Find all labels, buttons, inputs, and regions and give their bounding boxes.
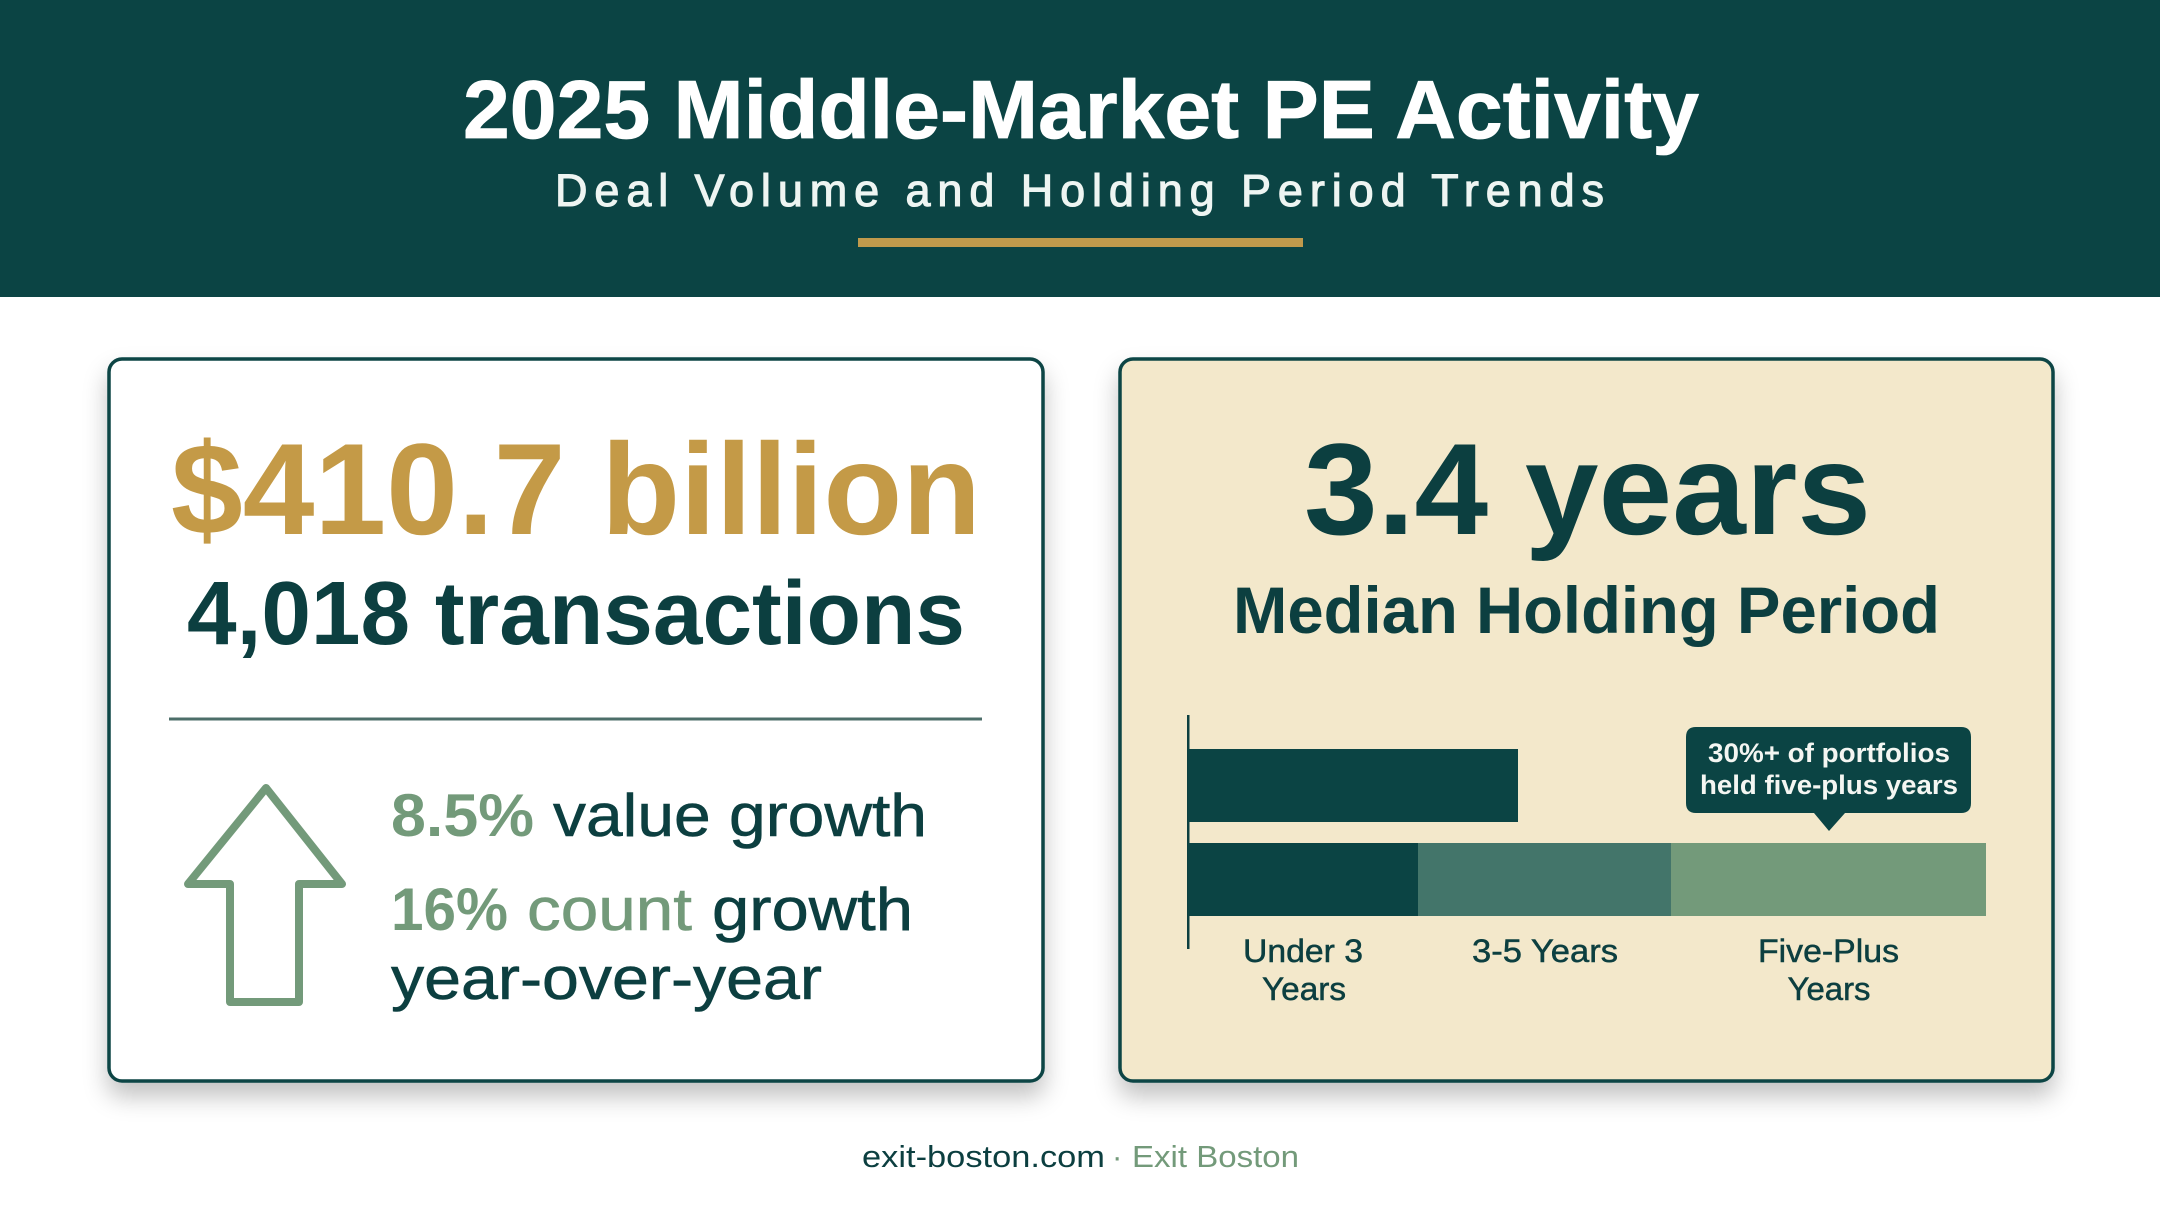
footer: exit-boston.com bbox=[862, 1139, 1105, 1174]
count label: count bbox=[527, 876, 692, 943]
callout: 30%+ of portfolios bbox=[1708, 738, 1950, 768]
panel: deal value and volume bbox=[109, 359, 1043, 1081]
panel: holding period bbox=[1120, 359, 2053, 1081]
bar chart bbox=[1187, 715, 1986, 1007]
median holding figure: 3.4 years bbox=[1304, 416, 1871, 562]
callout bbox=[1686, 727, 1971, 831]
stacked bar: five-plus years bbox=[1671, 843, 1986, 916]
footer: · bbox=[1112, 1139, 1122, 1174]
header band bbox=[0, 0, 2160, 297]
median holding label: Median Holding Period bbox=[1233, 573, 1940, 647]
subtitle: Deal Volume and Holding Period Trends bbox=[555, 165, 1604, 216]
label: under 3 years: Years bbox=[1262, 971, 1346, 1007]
label: five-plus years bbox=[1758, 933, 1899, 1007]
year-over-year label: year-over-year bbox=[391, 945, 822, 1012]
label: 3-5 years: 3-5 Years bbox=[1472, 933, 1618, 969]
title: 2025 Middle-Market PE Activity bbox=[463, 63, 1699, 156]
deal value figure: $410.7 billion bbox=[171, 416, 981, 562]
label: five-plus years: Years bbox=[1788, 971, 1870, 1007]
axis line bbox=[1187, 715, 1190, 949]
count growth percentage: 16% bbox=[391, 876, 508, 943]
stacked bar: under 3 years bbox=[1188, 843, 1418, 916]
footer bbox=[862, 1139, 1299, 1174]
growth stats bbox=[391, 782, 927, 1012]
label: under 3 years: Under 3 bbox=[1243, 933, 1363, 969]
growth label: growth bbox=[712, 876, 913, 943]
divider bbox=[169, 718, 982, 720]
icon: up arrow bbox=[188, 788, 342, 1002]
label: five-plus years: Five-Plus bbox=[1758, 933, 1899, 969]
label: under 3 years bbox=[1243, 933, 1363, 1007]
stacked bar: 3-5 years bbox=[1418, 843, 1671, 916]
callout: held five-plus years bbox=[1700, 770, 1958, 800]
value growth percentage: 8.5% bbox=[391, 782, 534, 849]
value growth label: value growth bbox=[553, 782, 927, 849]
gold accent rule bbox=[858, 238, 1303, 247]
median bar bbox=[1188, 749, 1518, 822]
footer: Exit Boston bbox=[1132, 1139, 1299, 1174]
transaction count: 4,018 transactions bbox=[187, 564, 965, 664]
